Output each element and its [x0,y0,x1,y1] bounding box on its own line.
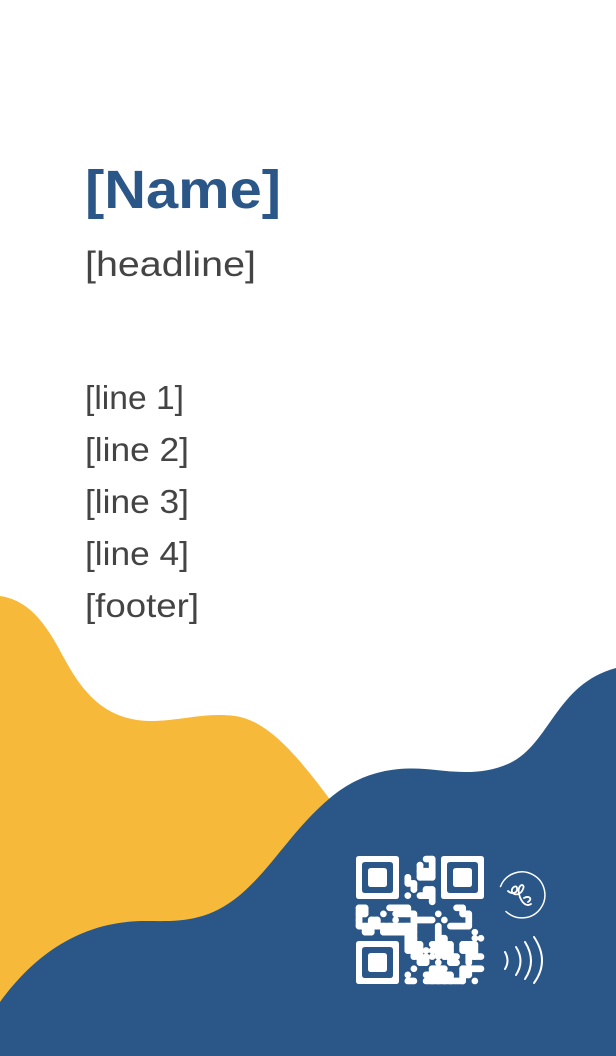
name heading: [Name] [85,160,281,220]
icon: contactless waves [505,937,542,983]
footer: [footer] [85,587,199,624]
headline: [headline] [85,245,256,284]
contact lines [85,379,199,624]
blue wave [0,668,616,1056]
QR data modules [359,859,481,981]
line 2: [line 2] [85,431,189,468]
QR code [356,856,484,984]
line 4: [line 4] [85,535,189,572]
line 3: [line 3] [85,483,189,520]
QR finder top right [441,856,484,899]
QR finder bottom left [356,941,399,984]
line 1: [line 1] [85,379,184,416]
QR finder top left [356,856,399,899]
yellow wave [0,596,345,1056]
icon: signature logo [500,872,545,918]
